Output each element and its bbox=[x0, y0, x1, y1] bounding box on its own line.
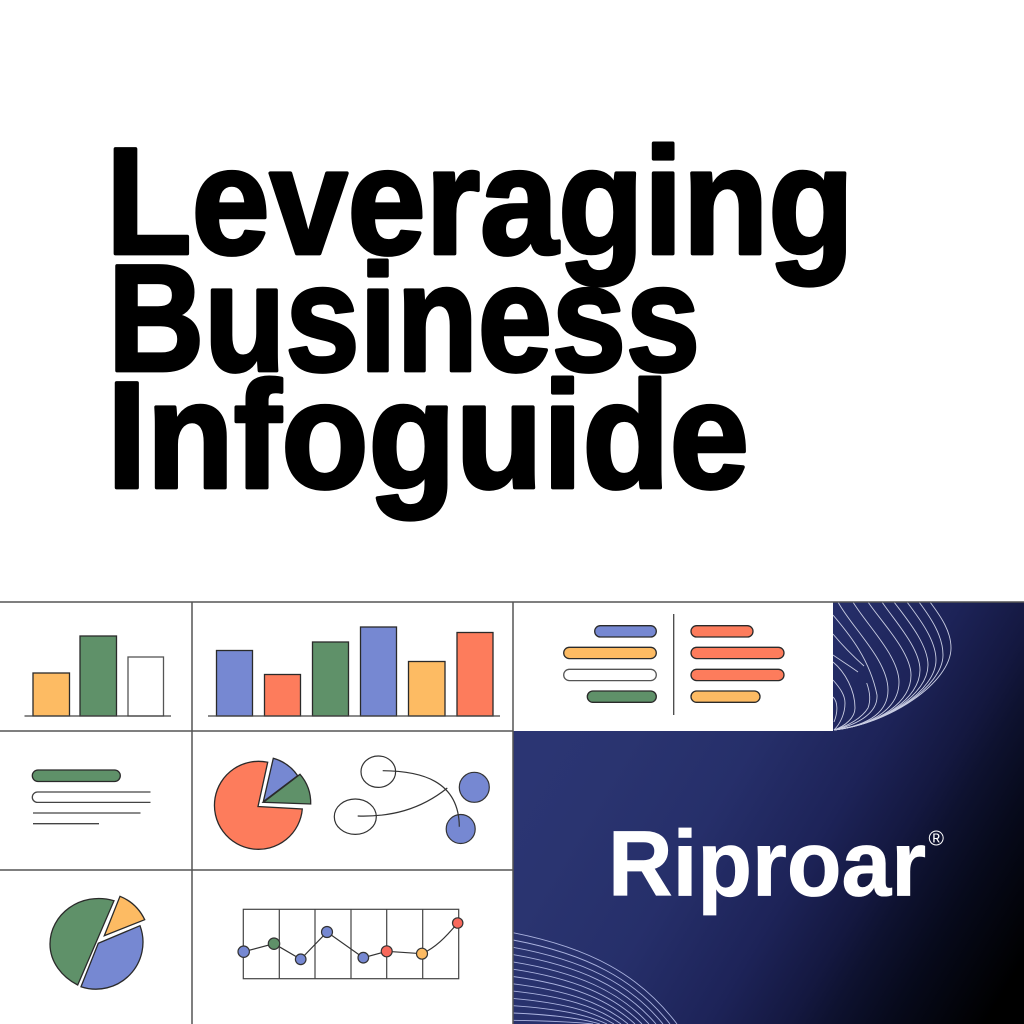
title: Infoguide bbox=[107, 350, 749, 520]
decorative wave lines, top bbox=[833, 602, 951, 730]
panel: navy brand background bbox=[513, 602, 1024, 1024]
chart: exploded pie bbox=[214, 758, 311, 849]
panel: text lines bbox=[32, 770, 150, 824]
title bbox=[106, 116, 854, 520]
decorative arc lines, bottom left bbox=[513, 933, 677, 1024]
registered mark: ® bbox=[928, 828, 944, 850]
panel: mirrored pill bars bbox=[564, 614, 784, 715]
diagram: node network bbox=[334, 756, 489, 844]
panel: large bar chart bbox=[208, 627, 500, 716]
logo: Riproar: Riproar bbox=[608, 812, 926, 916]
chart: exploded pie two bbox=[50, 896, 145, 989]
title: Business bbox=[108, 233, 700, 403]
grid lines bbox=[0, 602, 1024, 1024]
chart: line chart bbox=[238, 909, 463, 979]
panel: small bar chart bbox=[24, 636, 171, 716]
title: Leveraging bbox=[106, 116, 854, 286]
